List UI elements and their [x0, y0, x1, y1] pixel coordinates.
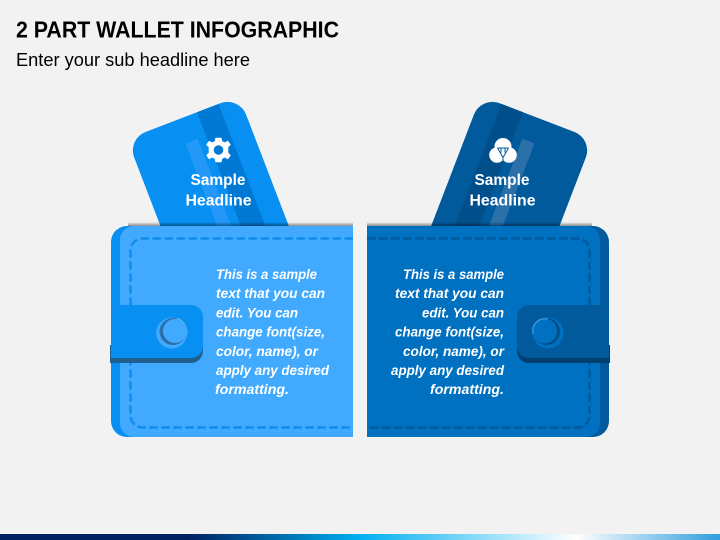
wallet back: right — [367, 226, 609, 437]
body text: right: This is a sample — [403, 266, 504, 282]
card heading: right: Headline — [470, 192, 536, 210]
title: 2 PART WALLET INFOGRAPHIC — [16, 16, 339, 42]
body text: left: apply any desired — [216, 362, 329, 378]
card heading: right: Sample — [474, 172, 530, 189]
wallet: right — [367, 226, 609, 437]
clasp: right — [517, 305, 610, 363]
clasp shadow: right — [517, 345, 610, 363]
card heading: left: Sample — [190, 172, 246, 189]
body text: left: formatting. — [215, 381, 289, 397]
bottom gradient bar — [0, 534, 720, 540]
wallet: left — [111, 226, 353, 437]
body text: left — [215, 266, 329, 397]
stitching: left — [130, 238, 353, 428]
wallet front: right — [367, 226, 600, 437]
body text: right: apply any desired — [391, 362, 504, 378]
subtitle: Enter your sub headline here — [16, 50, 250, 70]
clasp button: left — [156, 318, 187, 348]
stitching: right — [367, 238, 590, 428]
card heading: right — [470, 172, 536, 210]
body text: right: color, name), or — [403, 343, 506, 359]
body text: right: text that you can — [395, 285, 504, 301]
clasp button: right — [532, 318, 564, 348]
body text: left: change font(size, — [216, 324, 325, 340]
body text: left: text that you can — [216, 285, 325, 301]
clasp: left — [110, 305, 203, 363]
body text: right — [391, 266, 506, 397]
icon: gear — [206, 138, 231, 162]
body text: left: This is a sample — [216, 266, 317, 282]
body text: right: edit. You can — [422, 304, 504, 320]
body text: right: formatting. — [430, 381, 504, 397]
clasp strap: right — [517, 305, 609, 358]
wallet shadow: right — [367, 222, 592, 226]
body text: right: change font(size, — [395, 324, 504, 340]
card: left — [132, 102, 289, 226]
body text: left: edit. You can — [216, 304, 298, 320]
wallet front: left — [120, 226, 353, 437]
clasp shadow: left — [110, 345, 203, 363]
body text: left: color, name), or — [216, 343, 320, 359]
card heading: left: Headline — [186, 192, 252, 210]
clasp strap: left — [111, 305, 203, 358]
card heading: left — [186, 172, 252, 210]
icon: overlapping circles — [489, 138, 517, 163]
wallet shadow: left — [128, 222, 353, 226]
card: right — [431, 102, 588, 226]
wallet back: left — [111, 226, 353, 437]
